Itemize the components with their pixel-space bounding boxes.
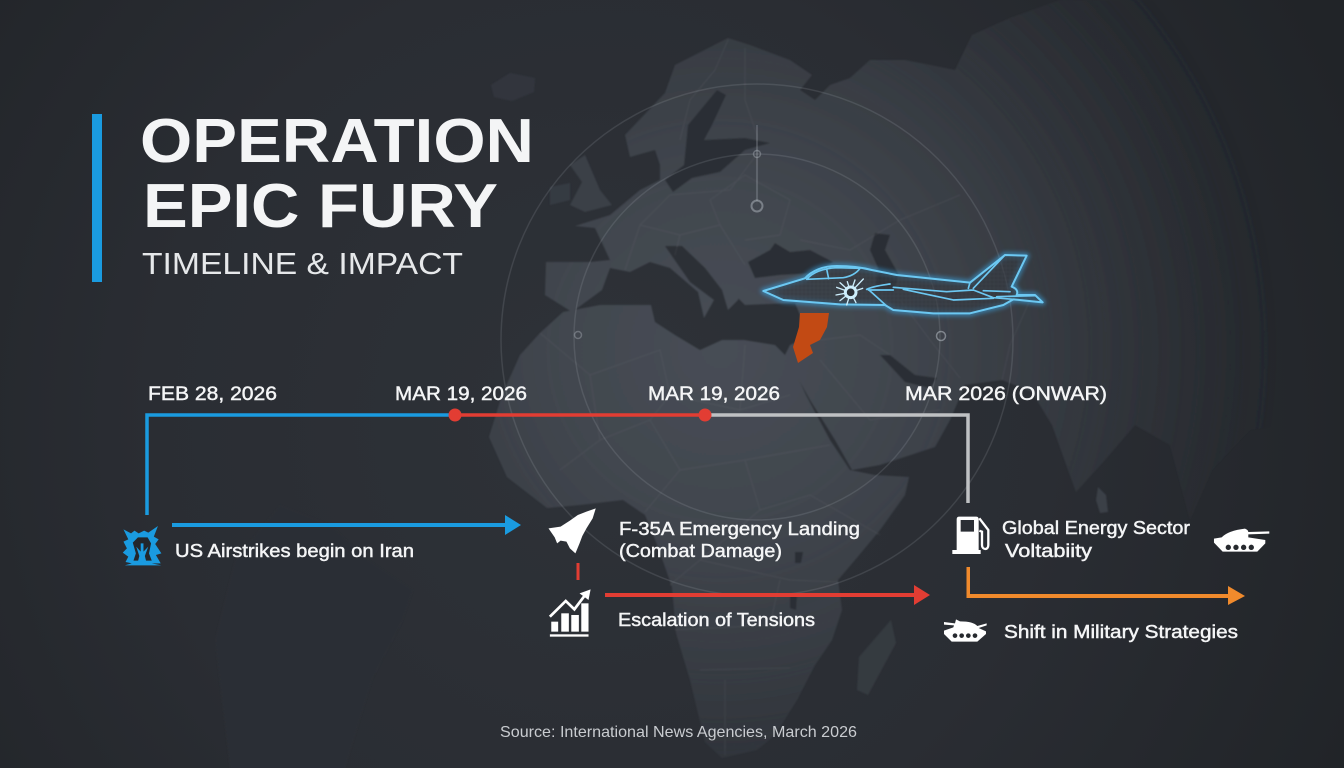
timeline dates — [148, 384, 1107, 405]
event: US airstrikes — [123, 515, 521, 565]
title: EPIC FURY — [143, 172, 498, 241]
event label — [1002, 518, 1190, 561]
event: F-35A landing — [548, 508, 860, 580]
icon: fighter jet — [548, 508, 596, 553]
icon: tank — [1214, 529, 1269, 552]
timeline track — [147, 408, 968, 515]
timeline — [147, 384, 1107, 515]
country borders — [540, 40, 1030, 755]
subtitle: TIMELINE & IMPACT — [142, 246, 463, 281]
event: escalation — [550, 585, 930, 637]
event label: Shift in Military Strategies — [1004, 622, 1238, 642]
icon: tank — [944, 619, 987, 642]
title — [140, 107, 534, 241]
icon: explosion — [123, 526, 161, 565]
event label: Escalation of Tensions — [618, 610, 815, 630]
accent bar — [92, 114, 102, 282]
source note: Source: International News Agencies, March 2026 — [500, 724, 857, 741]
event label: (Combat Damage) — [619, 541, 782, 561]
event label: US Airstrikes begin on Iran — [175, 541, 414, 561]
impact burst — [836, 279, 863, 305]
arrow: orange — [966, 567, 1245, 605]
timeline dates: MAR 19, 2026 — [648, 384, 780, 405]
arrow: red — [605, 585, 930, 605]
event label: Global Energy Sector — [1002, 518, 1190, 538]
F-35 outline illustration — [763, 255, 1043, 313]
event label: Voltabiity — [1005, 541, 1092, 561]
title block — [92, 107, 534, 282]
seas — [665, 90, 937, 610]
arrow: blue — [172, 515, 521, 535]
event: military strategies — [944, 619, 1238, 642]
event label — [619, 519, 860, 561]
event label: F-35A Emergency Landing — [619, 519, 860, 539]
timeline dates: MAR 2026 (ONWAR) — [905, 384, 1107, 405]
title: OPERATION — [140, 107, 534, 176]
timeline dates: MAR 19, 2026 — [395, 384, 527, 405]
icon: fuel pump — [952, 517, 988, 554]
connector — [576, 563, 580, 580]
highlighted territory — [793, 313, 829, 363]
icon: rising chart — [550, 589, 591, 637]
timeline dates: FEB 28, 2026 — [148, 384, 277, 405]
range rings and crosshair — [501, 84, 1013, 596]
event: energy sector — [952, 517, 1269, 605]
